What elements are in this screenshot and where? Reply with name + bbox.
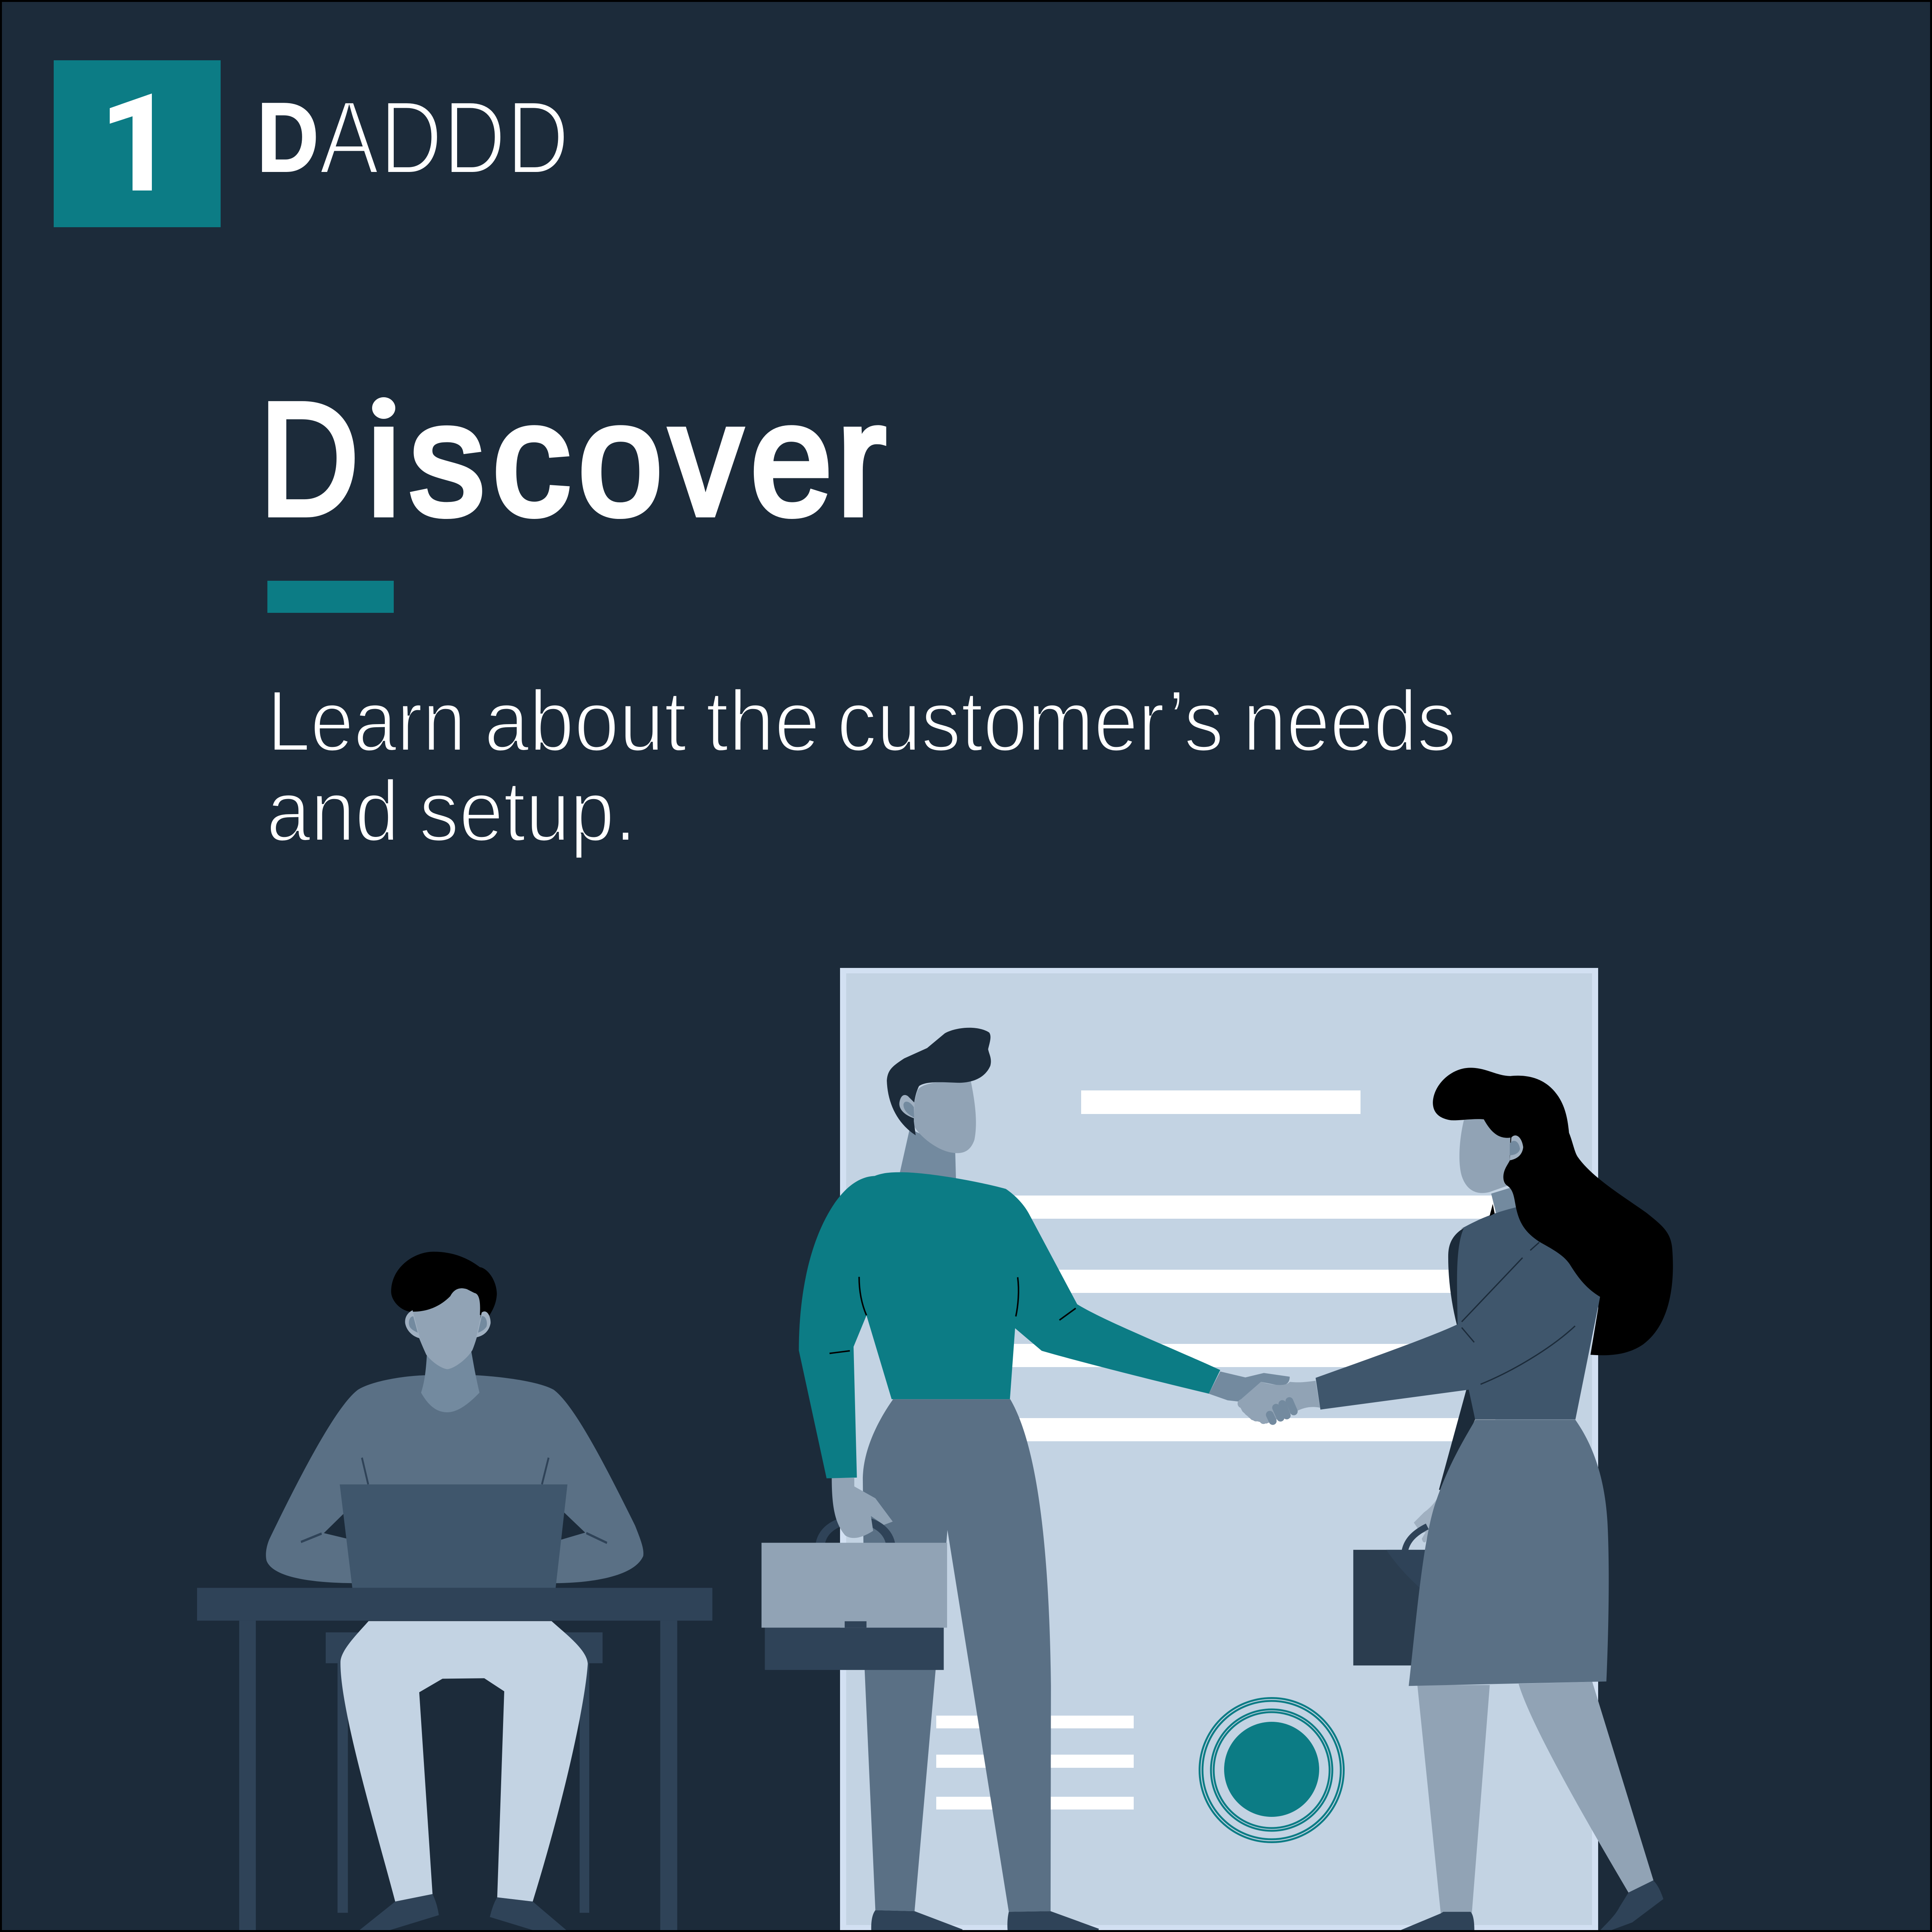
neck (900, 1129, 956, 1179)
body text: about (484, 673, 687, 769)
briefcase (762, 1543, 947, 1670)
sweater creases (301, 1458, 607, 1543)
arm gaps (324, 1512, 585, 1540)
body text: needs (1243, 673, 1456, 769)
legs (1417, 1682, 1653, 1913)
blouse (1316, 1207, 1600, 1420)
body text: setup. (419, 763, 637, 859)
ear (1510, 1135, 1523, 1160)
heading: Discover: v (670, 369, 742, 548)
DADDD wordmark: D (257, 82, 319, 192)
heading: Discover: r (837, 369, 886, 548)
hair (1433, 1068, 1673, 1355)
heading: Discover: D (260, 369, 359, 548)
briefcase handle (820, 1520, 891, 1544)
sweater creases (830, 1277, 1076, 1354)
blouse seams (1462, 1242, 1575, 1384)
heading: Discover (260, 369, 886, 548)
document title line (1081, 1090, 1361, 1114)
sweater (266, 1375, 643, 1583)
neck (421, 1348, 480, 1412)
hair (391, 1252, 497, 1316)
shoes (357, 1894, 568, 1932)
document seal (1199, 1698, 1344, 1842)
teal sweater (799, 1172, 1220, 1478)
DADDD wordmark: D (380, 80, 442, 196)
step number badge (54, 60, 221, 234)
desk (197, 1588, 713, 1932)
accent bar (267, 581, 394, 613)
bag handle (1405, 1526, 1427, 1551)
face (1459, 1118, 1519, 1193)
hair (887, 1028, 991, 1135)
DADDD wordmark (257, 80, 569, 196)
shoes (871, 1910, 1099, 1932)
face (410, 1288, 481, 1369)
clasped hand (1238, 1381, 1320, 1424)
laptop (340, 1485, 568, 1588)
panel: contract document (840, 968, 1598, 1932)
forearm and wrist (1209, 1371, 1290, 1402)
document signature lines (936, 1716, 1134, 1810)
legs, briefcase (762, 1399, 1099, 1932)
ear (899, 1095, 915, 1118)
ears (405, 1310, 491, 1338)
heading: Discover: o (578, 369, 663, 548)
figure: man seated at laptop (197, 1252, 713, 1932)
body text: customer’s (837, 673, 1224, 769)
body text (266, 673, 1456, 859)
body text: the (706, 673, 820, 769)
heading: Discover: s (409, 369, 485, 548)
heading: Discover: i (367, 369, 401, 548)
DADDD wordmark: A (319, 80, 379, 196)
number 1: 1 (99, 61, 184, 234)
DADDD wordmark: D (443, 80, 506, 196)
bag (1353, 1550, 1426, 1665)
fingers (1270, 1401, 1294, 1421)
far arm (1439, 1228, 1475, 1491)
document body lines (927, 1196, 1495, 1441)
hair sliver at neck (1490, 1204, 1495, 1216)
heading: Discover: e (750, 369, 832, 548)
heading: Discover: c (492, 369, 570, 548)
chair (326, 1632, 602, 1913)
figure: woman with bag (1238, 1068, 1673, 1932)
neck (1491, 1187, 1517, 1213)
hand holding briefcase (832, 1478, 893, 1538)
body text: Learn (267, 673, 466, 769)
DADDD wordmark: D (507, 80, 569, 196)
trousers (340, 1621, 588, 1901)
body text: and (266, 763, 399, 859)
trousers (863, 1399, 1051, 1912)
shoes (1396, 1881, 1663, 1932)
face (913, 1081, 976, 1153)
figure: man with briefcase (762, 1028, 1290, 1932)
skirt (1409, 1420, 1609, 1686)
hand holding bag (1414, 1491, 1442, 1543)
